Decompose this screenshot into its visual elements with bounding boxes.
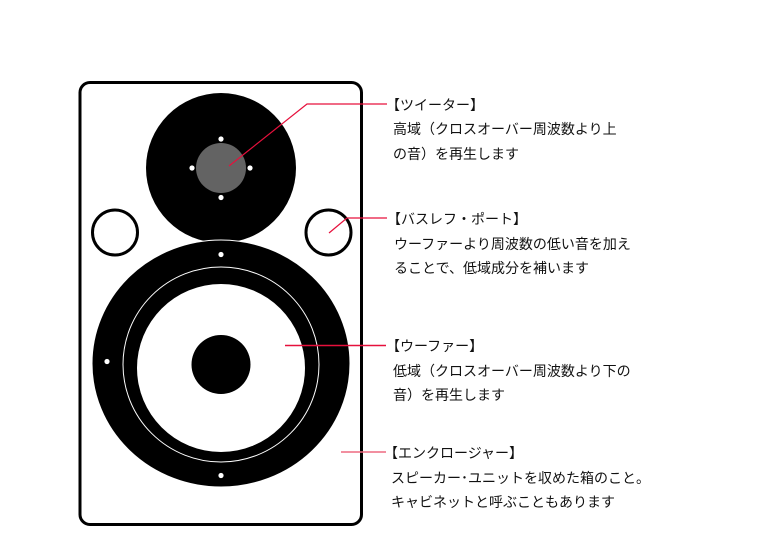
leader line: enclosure [341,451,386,453]
text: bass reflex port: ウーファーより周波数の低い音を加え [394,236,631,252]
enclosure cabinet [80,82,362,524]
text: tweeter [386,96,617,162]
leader line: tweeter [229,104,387,166]
text: tweeter: 【ツイーター】 [386,96,484,112]
text: bass reflex port: 【バスレフ・ポート】 [387,211,527,227]
right bass reflex port [306,210,351,255]
text: woofer [386,338,631,403]
left bass reflex port [92,210,138,255]
text: woofer: 低域（クロスオーバー周波数より下の [393,362,631,378]
woofer [92,240,350,487]
text: tweeter: 高域（クロスオーバー周波数より上 [393,121,617,137]
text: enclosure: スピーカー･ユニットを収めた箱のこと。 [391,470,650,486]
text: woofer: 音）を再生します [393,387,505,403]
leader line: woofer [285,344,386,346]
leader line: bass reflex port [329,218,387,233]
text: tweeter: の音）を再生します [393,146,519,162]
text: bass reflex port: ることで、低域成分を補います [394,260,589,276]
text: woofer: 【ウーファー】 [386,338,483,354]
text: enclosure [384,445,650,510]
text: enclosure: キャビネットと呼ぶこともあります [391,494,615,510]
text: enclosure: 【エンクロージャー】 [384,445,523,461]
text: bass reflex port [387,211,631,276]
tweeter [146,93,296,243]
